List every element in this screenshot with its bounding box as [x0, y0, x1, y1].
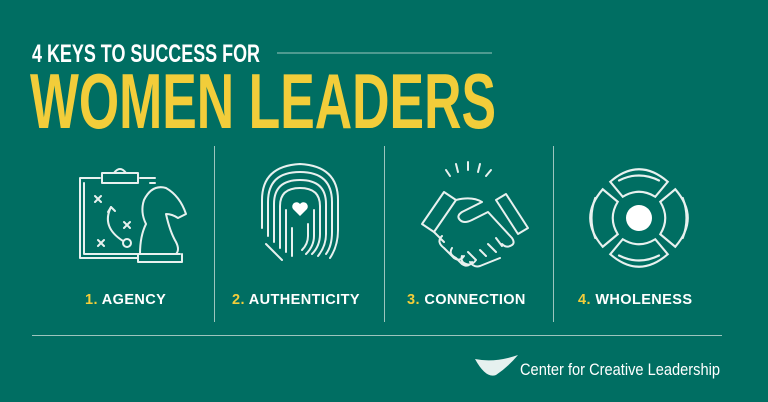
- icon: target lifebuoy: [590, 169, 688, 267]
- label: authenticity: 2. AUTHENTICITY: [232, 292, 360, 308]
- panel: agency: [80, 169, 186, 308]
- icon: center dot: [626, 205, 652, 231]
- title: main heading: WOMEN LEADERS: [30, 57, 496, 145]
- logo: Center for Creative Leadership: [475, 355, 720, 379]
- label: wholeness: 4. WHOLENESS: [578, 292, 692, 308]
- icon: clipboard and knight: [80, 169, 186, 262]
- icon: heart: [292, 202, 308, 216]
- label: connection: 3. CONNECTION: [407, 292, 526, 308]
- panel: wholeness: [578, 169, 692, 308]
- icon: fingerprint with heart: [262, 164, 338, 260]
- logo: Center for Creative Leadership: Center for Creative Leadership: [520, 360, 720, 379]
- panel: authenticity: [232, 164, 360, 308]
- label: agency: 1. AGENCY: [85, 292, 166, 308]
- title: subheading: 4 KEYS TO SUCCESS FOR: [32, 40, 260, 68]
- icon: handshake: [422, 162, 528, 266]
- icon: logo swoosh: [475, 355, 518, 376]
- panel: connection: [407, 162, 528, 308]
